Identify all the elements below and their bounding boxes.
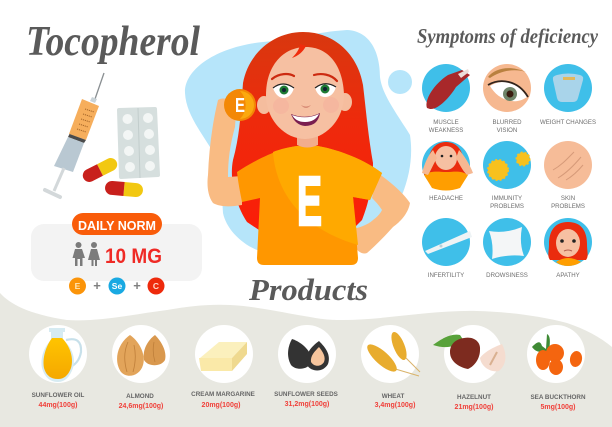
vitamin combination: +	[133, 278, 141, 293]
product: sunflower oil	[29, 325, 87, 409]
product: sea buckthorn: SEA BUCKTHORN	[530, 394, 586, 401]
vitamin combination: +	[93, 278, 101, 293]
symptom: blurred vision: VISION	[497, 127, 517, 134]
symptom: blurred vision: BLURRED	[492, 119, 522, 126]
product: cream margarine: 20mg(100g)	[202, 402, 240, 409]
product: hazelnut: 21mg(100g)	[455, 404, 493, 411]
product: almond	[112, 325, 170, 410]
symptom: skin problems: PROBLEMS	[551, 203, 585, 210]
icon: capsule one	[81, 156, 119, 184]
shirt letter: E	[297, 162, 322, 240]
eyebrows	[272, 74, 337, 81]
product: cream margarine: CREAM MARGARINE	[191, 391, 255, 398]
symptom: drowsiness: DROWSINESS	[486, 272, 528, 279]
symptom: skin problems: SKIN	[561, 195, 575, 202]
heading: products: Products	[248, 272, 368, 307]
symptom: infertility	[422, 218, 472, 279]
daily norm badge: DAILY NORM	[78, 218, 156, 233]
title: Tocopherol	[26, 19, 200, 65]
beige products band	[0, 293, 612, 427]
icon: syringe	[45, 73, 104, 197]
panel: daily norm	[31, 213, 202, 294]
symptom: skin problems	[544, 141, 592, 210]
product: wheat: WHEAT	[382, 393, 404, 400]
dose value: 10 MG	[105, 245, 162, 268]
product: almond: ALMOND	[126, 393, 154, 400]
product: sunflower seeds: 31,2mg(100g)	[285, 401, 329, 408]
character: girl with vitamin E	[208, 32, 410, 265]
small blob circle	[388, 70, 412, 94]
symptom: drowsiness	[483, 218, 531, 279]
symptom: immunity problems	[483, 141, 531, 210]
icon: man and woman	[72, 242, 100, 266]
symptom: infertility: INFERTILITY	[428, 272, 464, 279]
nose	[301, 105, 311, 108]
cheeks	[273, 97, 339, 114]
product: almond: 24,6mg(100g)	[119, 403, 163, 410]
product: sunflower seeds	[274, 325, 338, 408]
character backdrop blob	[185, 30, 411, 251]
product: sea buckthorn	[527, 325, 586, 411]
product: hazelnut	[433, 325, 505, 411]
neck	[297, 130, 318, 148]
symptom: weight changes	[540, 64, 596, 126]
symptom: headache: HEADACHE	[429, 195, 463, 202]
vitamin capsule in hand	[224, 89, 256, 121]
vitamin capsule in hand: E	[235, 95, 245, 117]
vitamin combination: C	[153, 281, 159, 291]
symptom: immunity problems: PROBLEMS	[490, 203, 524, 210]
symptom: immunity problems: IMMUNITY	[492, 195, 522, 202]
symptom: apathy	[544, 218, 592, 279]
shirt light fold	[273, 146, 382, 245]
product: sea buckthorn: 5mg(100g)	[540, 404, 576, 411]
vitamin combination	[69, 278, 164, 294]
raised arm	[208, 98, 242, 206]
icon: capsule two	[104, 180, 144, 198]
symptom: apathy: APATHY	[556, 272, 580, 279]
shirt	[237, 146, 382, 265]
ears	[257, 93, 352, 114]
hair	[232, 32, 373, 232]
symptom: headache	[422, 141, 473, 202]
symptom: muscle weakness	[422, 64, 470, 134]
product: hazelnut: HAZELNUT	[457, 394, 491, 401]
product: cream margarine	[191, 325, 255, 409]
hand on hip arm	[348, 172, 410, 254]
product: sunflower oil: SUNFLOWER OIL	[32, 392, 85, 399]
face	[266, 47, 344, 139]
product: wheat	[361, 325, 420, 409]
daily norm badge	[72, 213, 162, 235]
product: sunflower oil: 44mg(100g)	[39, 402, 77, 409]
product: sunflower seeds: SUNFLOWER SEEDS	[274, 391, 338, 398]
symptom: blurred vision	[483, 64, 531, 134]
vitamin combination: E	[75, 281, 81, 291]
eyes	[273, 84, 336, 98]
symptom: weight changes: WEIGHT CHANGES	[540, 119, 596, 126]
mouth	[291, 113, 320, 126]
hair parting	[292, 44, 306, 58]
vitamin combination: Se	[112, 281, 122, 291]
symptom: muscle weakness: WEAKNESS	[429, 127, 463, 134]
symptom: muscle weakness: MUSCLE	[433, 119, 459, 126]
icon: blister pack	[117, 107, 160, 179]
product: wheat: 3,4mg(100g)	[375, 402, 415, 409]
